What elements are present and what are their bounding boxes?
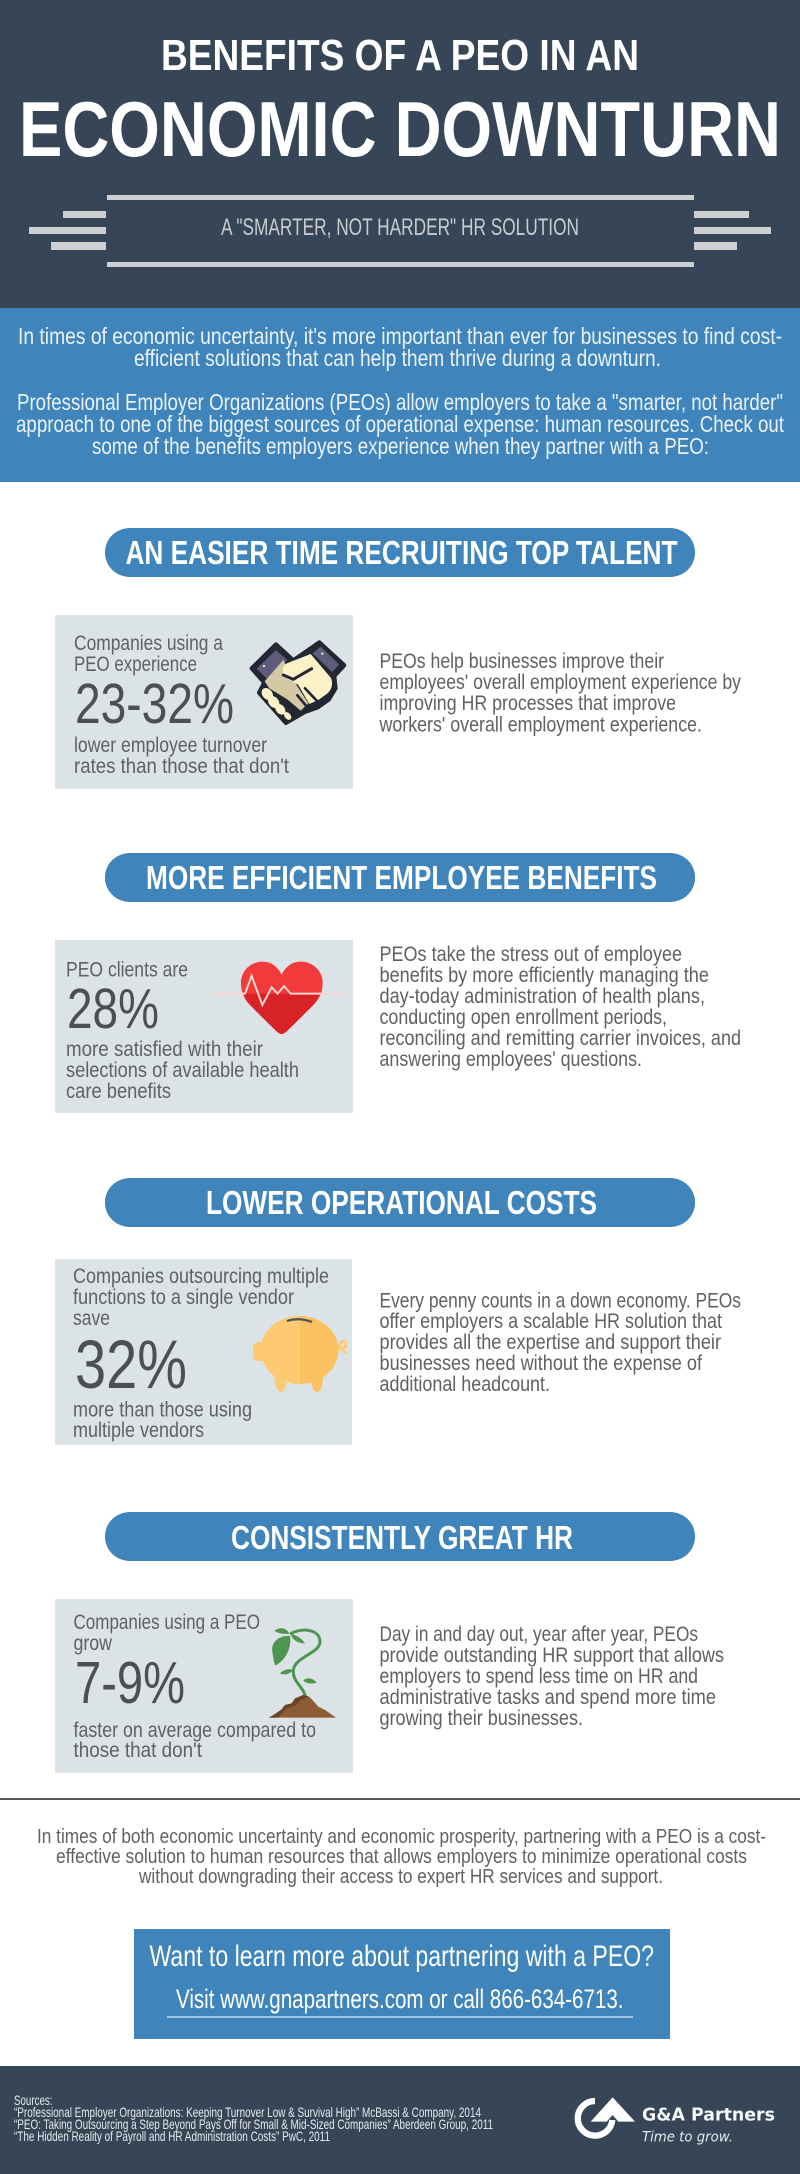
stat panel: growth: 7-9% — [75, 1650, 185, 1716]
stat panel: satisfaction: selections of available health — [66, 1059, 299, 1082]
stat panel: savings — [55, 1259, 352, 1445]
description: employee benefits: reconciling and remitting carrier invoices, and — [380, 1027, 741, 1050]
description: employee benefits: day-today administration of health plans, — [380, 985, 705, 1008]
description: great HR: provide outstanding HR support that allows — [380, 1644, 724, 1667]
stat panel: growth: faster on average compared to — [74, 1719, 316, 1742]
description: employee benefits — [380, 943, 741, 1071]
sources: Sources: — [14, 2092, 52, 2108]
stat panel: satisfaction: care benefits — [66, 1080, 171, 1103]
description: employee benefits: answering employees' questions. — [380, 1048, 642, 1071]
panel: introduction — [0, 308, 800, 482]
logo: G&A Partners: Time to grow. — [642, 2130, 733, 2146]
description: operational costs: businesses need without the expense of — [380, 1352, 702, 1375]
panel: header — [0, 0, 800, 308]
icon: sprouting plant — [269, 1628, 336, 1718]
heading: operational costs — [105, 1178, 695, 1227]
description: great HR — [380, 1623, 724, 1730]
stat panel: savings: functions to a single vendor — [73, 1286, 294, 1309]
stat panel: turnover: lower employee turnover — [74, 734, 267, 757]
icon: piggy bank — [253, 1316, 347, 1392]
stat panel: satisfaction — [55, 940, 353, 1113]
description: operational costs: offer employers a scalable HR solution that — [380, 1310, 722, 1333]
stat panel: savings: Companies outsourcing multiple — [73, 1265, 329, 1288]
stat panel: growth — [55, 1599, 353, 1773]
stat panel: savings: 32% — [75, 1326, 187, 1403]
description: great HR: employers to spend less time on HR and — [380, 1665, 698, 1688]
call to action — [134, 1929, 670, 2039]
section: employee benefits — [55, 853, 741, 1113]
heading: recruiting — [105, 528, 695, 577]
stat panel: turnover: 23-32% — [75, 672, 234, 736]
description: operational costs: additional headcount. — [380, 1373, 550, 1396]
sources: “The Hidden Reality of Payroll and HR Administration Costs” PwC, 2011 — [14, 2128, 330, 2144]
description: employee benefits: conducting open enrollment periods, — [380, 1006, 667, 1029]
section: great HR — [55, 1512, 724, 1773]
section: operational costs — [55, 1178, 741, 1445]
heading: great HR: CONSISTENTLY GREAT HR — [231, 1519, 573, 1556]
description: operational costs: provides all the expertise and support their — [380, 1331, 721, 1354]
sources — [14, 2092, 493, 2144]
description: great HR: Day in and day out, year after year, PEOs — [380, 1623, 698, 1646]
heading: employee benefits: MORE EFFICIENT EMPLOYEE BENEFITS — [146, 859, 657, 896]
description: operational costs — [380, 1290, 741, 1396]
title — [19, 31, 781, 173]
subtitle with speed lines — [29, 195, 771, 267]
closing statement — [37, 1825, 766, 1888]
call to action: Want to learn more about partnering with a PEO? — [150, 1940, 654, 1973]
heading: operational costs: LOWER OPERATIONAL COSTS — [206, 1184, 597, 1221]
subtitle with speed lines: A "SMARTER, NOT HARDER" HR SOLUTION — [221, 214, 579, 241]
sources: “Professional Employer Organizations: Keeping Turnover Low & Survival High” McBassi & Company, 2014 — [14, 2104, 481, 2120]
icon: heart with pulse — [211, 962, 346, 1034]
description: recruiting: employees' overall employment experience by — [380, 671, 741, 694]
description: great HR: administrative tasks and spend more time — [380, 1686, 716, 1709]
stat panel: turnover — [55, 615, 353, 789]
stat panel: savings: save — [73, 1307, 110, 1330]
stat panel: growth: grow — [74, 1632, 113, 1655]
heading: employee benefits — [105, 853, 695, 902]
logo: G&A Partners — [578, 2097, 775, 2146]
description: recruiting: PEOs help businesses improve their — [380, 650, 664, 673]
stat panel: satisfaction: 28% — [67, 977, 159, 1041]
stat panel: turnover: rates than those that don't — [74, 755, 289, 778]
stat panel: satisfaction: more satisfied with their — [66, 1038, 263, 1061]
panel: introduction: efficient solutions that can help them thrive during a downturn. — [134, 345, 661, 371]
description: recruiting: improving HR processes that improve — [380, 692, 676, 715]
stat panel: growth: those that don't — [74, 1739, 202, 1762]
stat panel: savings: multiple vendors — [73, 1419, 204, 1442]
logo: G&A Partners: G&A Partners — [642, 2105, 775, 2126]
stat panel: satisfaction: PEO clients are — [66, 958, 188, 982]
heading: great HR — [105, 1512, 695, 1561]
description: employee benefits: PEOs take the stress out of employee — [380, 943, 682, 966]
description: recruiting — [379, 650, 741, 736]
icon: handshake — [252, 643, 344, 723]
description: great HR: growing their businesses. — [380, 1707, 583, 1730]
heading: recruiting: AN EASIER TIME RECRUITING TOP TALENT — [126, 534, 678, 571]
closing statement: without downgrading their access to expert HR services and support. — [138, 1865, 663, 1888]
stat panel: turnover: Companies using a — [74, 632, 223, 655]
description: employee benefits: benefits by more efficiently managing the — [380, 964, 709, 987]
stat panel: savings: more than those using — [73, 1398, 252, 1422]
sources: “PEO: Taking Outsourcing a Step Beyond Pays Off for Small & Mid-Sized Companies” Aberdeen Group, 2011 — [14, 2116, 493, 2132]
panel: footer — [0, 2066, 800, 2174]
stat panel: turnover: PEO experience — [74, 653, 197, 676]
title: BENEFITS OF A PEO IN AN — [161, 31, 639, 80]
call to action: Visit www.gnapartners.com or call 866-634-6713. — [176, 1984, 624, 2014]
description: recruiting: workers' overall employment experience. — [379, 714, 702, 736]
section: recruiting — [55, 528, 741, 789]
stat panel: growth: Companies using a PEO — [74, 1611, 260, 1634]
